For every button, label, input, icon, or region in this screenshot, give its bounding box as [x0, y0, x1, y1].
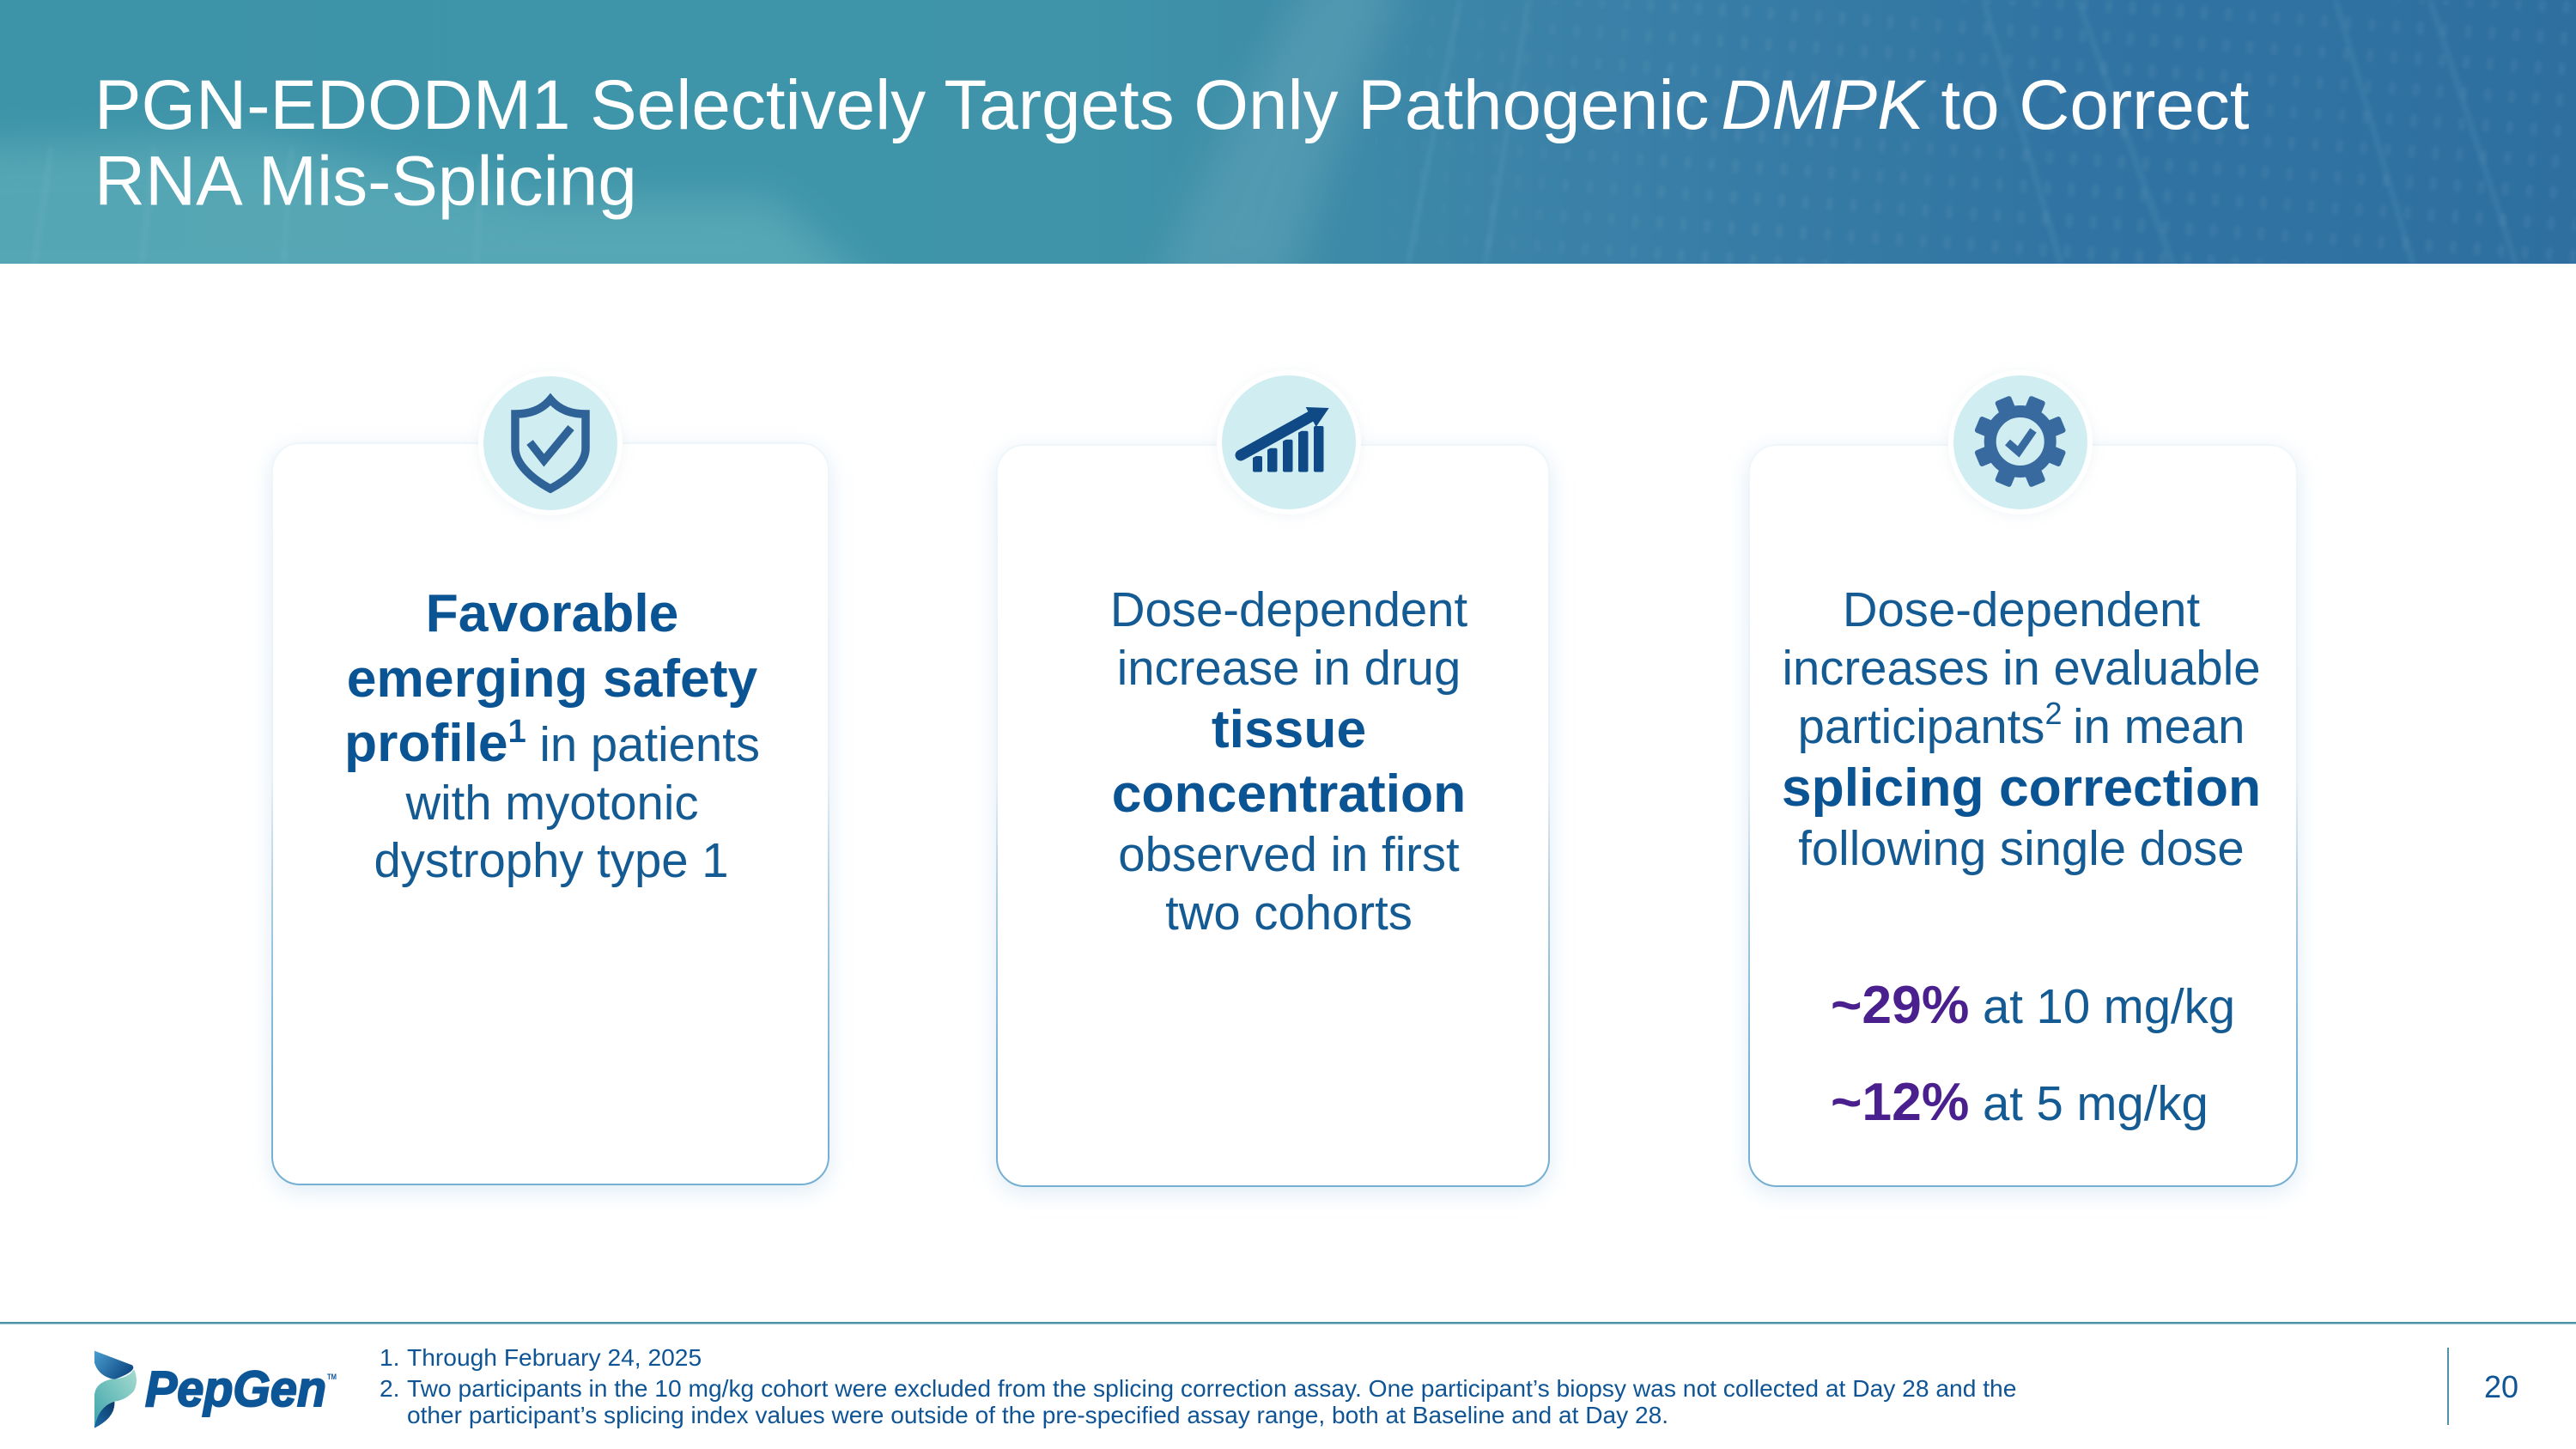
- text: tissue concentration statement: Dose-dependent: [1110, 582, 1467, 636]
- text: tissue concentration statement: tissue: [1212, 700, 1366, 759]
- text: splicing correction statement: Dose-dependent: [1843, 582, 2200, 636]
- panel: splicing correction: [1749, 373, 2297, 1186]
- icon: gear check: [1951, 373, 2090, 512]
- footnotes: 1.: [380, 1343, 400, 1371]
- page number: 20: [2484, 1369, 2518, 1404]
- stat: 29 percent at 10 mg/kg: ~29% at 10 mg/kg: [1831, 976, 2235, 1035]
- text: safety statement: 1: [508, 714, 526, 750]
- text: splicing correction statement: following single dose: [1798, 821, 2245, 875]
- text: safety statement: in patients: [526, 717, 760, 771]
- text: splicing correction statement: 2: [2044, 696, 2062, 731]
- stat: 12 percent at 5 mg/kg: ~12% at 5 mg/kg: [1831, 1073, 2208, 1132]
- footnotes: other participant’s splicing index values were outside of the pre-specified assay range, both at Baseline and at Day 28.: [407, 1402, 1668, 1428]
- text: tissue concentration statement: concentration: [1112, 764, 1466, 824]
- text: safety statement: profile: [344, 714, 526, 773]
- footnotes: 2.: [380, 1374, 400, 1402]
- text: splicing correction statement: participants: [1798, 696, 2245, 753]
- text: splicing correction statement: in mean: [2059, 699, 2245, 753]
- title: RNA Mis-Splicing: [94, 143, 637, 220]
- text: safety statement: emerging safety: [347, 649, 758, 709]
- panel: tissue concentration: [997, 373, 1549, 1186]
- footnotes: Through February 24, 2025: [407, 1343, 702, 1371]
- icon: shield check: [481, 374, 620, 513]
- logo: PepGen: PepGen: [145, 1361, 326, 1417]
- text: safety statement: dystrophy type 1: [374, 833, 729, 887]
- icon: rising bar chart: [1219, 373, 1358, 512]
- text: safety statement: Favorable: [426, 584, 678, 643]
- logo: PepGen: [94, 1351, 337, 1428]
- text: tissue concentration statement: increase in drug: [1117, 641, 1461, 695]
- text: safety statement: with myotonic: [404, 776, 699, 830]
- text: tissue concentration statement: two cohorts: [1165, 886, 1413, 940]
- text: tissue concentration statement: observed in first: [1118, 827, 1460, 881]
- logo: PepGen: TM: [327, 1373, 337, 1381]
- footnotes: Two participants in the 10 mg/kg cohort were excluded from the splicing correction assay. One participant’s biopsy was not collected at Day 28 and the: [407, 1374, 2016, 1402]
- panel: safety: [272, 374, 829, 1184]
- text: splicing correction statement: splicing correction: [1782, 758, 2261, 818]
- header banner: [0, 0, 2576, 264]
- text: splicing correction statement: increases in evaluable: [1782, 641, 2261, 695]
- title: PGN-EDODM1 Selectively Targets Only Pathogenic DMPK to Correct: [94, 66, 2249, 144]
